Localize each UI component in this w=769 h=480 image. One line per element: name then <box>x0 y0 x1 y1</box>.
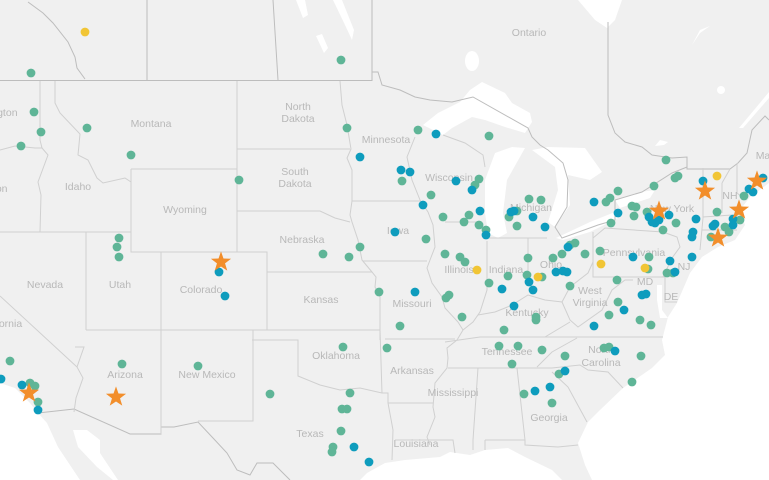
state and province labels: Nebraska <box>280 234 325 246</box>
state and province labels: Georgia <box>530 412 568 424</box>
state and province labels: Montana <box>131 118 172 130</box>
state and province labels: South <box>281 166 309 178</box>
state and province labels: Virginia <box>573 297 608 309</box>
state and province labels: Missouri <box>392 298 432 310</box>
state and province labels: Idaho <box>65 181 91 193</box>
state and province labels: Carolina <box>581 357 621 369</box>
state and province labels: Ohio <box>540 259 562 271</box>
state and province labels: NJ <box>678 261 690 273</box>
state and province labels: NH <box>722 190 738 202</box>
state and province labels: Indiana <box>489 264 523 276</box>
blue location markers <box>0 130 767 466</box>
state and province labels: New Mexico <box>178 369 236 381</box>
state and province labels: Dakota <box>278 178 312 190</box>
state and province labels: Iowa <box>387 225 409 237</box>
state and province labels: Kentucky <box>505 307 549 319</box>
state and province labels: Tennessee <box>482 346 533 358</box>
state and province labels: North <box>285 101 311 113</box>
state and province labels: West <box>578 285 602 297</box>
state and province labels: Kansas <box>303 294 339 306</box>
state and province labels: Nevada <box>27 279 63 291</box>
yellow location markers <box>81 28 721 281</box>
state and province labels: Dakota <box>281 113 315 125</box>
state and province labels: Oklahoma <box>312 350 360 362</box>
state and province labels: Arkansas <box>390 365 434 377</box>
state and province labels: Arizona <box>107 369 143 381</box>
state and province labels: Michigan <box>510 202 552 214</box>
state and province labels: Colorado <box>180 284 222 296</box>
state and province labels: Pennsylvania <box>603 247 665 259</box>
state and province labels: Ontario <box>512 27 546 39</box>
state and province labels: New York <box>650 203 695 215</box>
state and province labels: Minnesota <box>362 134 410 146</box>
state and province labels: Illinois <box>444 264 474 276</box>
state and province labels: DE <box>664 291 678 303</box>
state and province labels: North <box>588 344 614 356</box>
state and province labels: Texas <box>296 428 324 440</box>
star markers <box>19 170 767 406</box>
state and province labels: Mississippi <box>428 387 478 399</box>
state and province labels: MD <box>637 276 654 288</box>
state and province labels: Utah <box>109 279 131 291</box>
state and province labels: Wyoming <box>163 204 207 216</box>
state and province labels: Wisconsin <box>425 172 473 184</box>
state and province labels: Louisiana <box>394 438 439 450</box>
state borders <box>0 81 742 460</box>
